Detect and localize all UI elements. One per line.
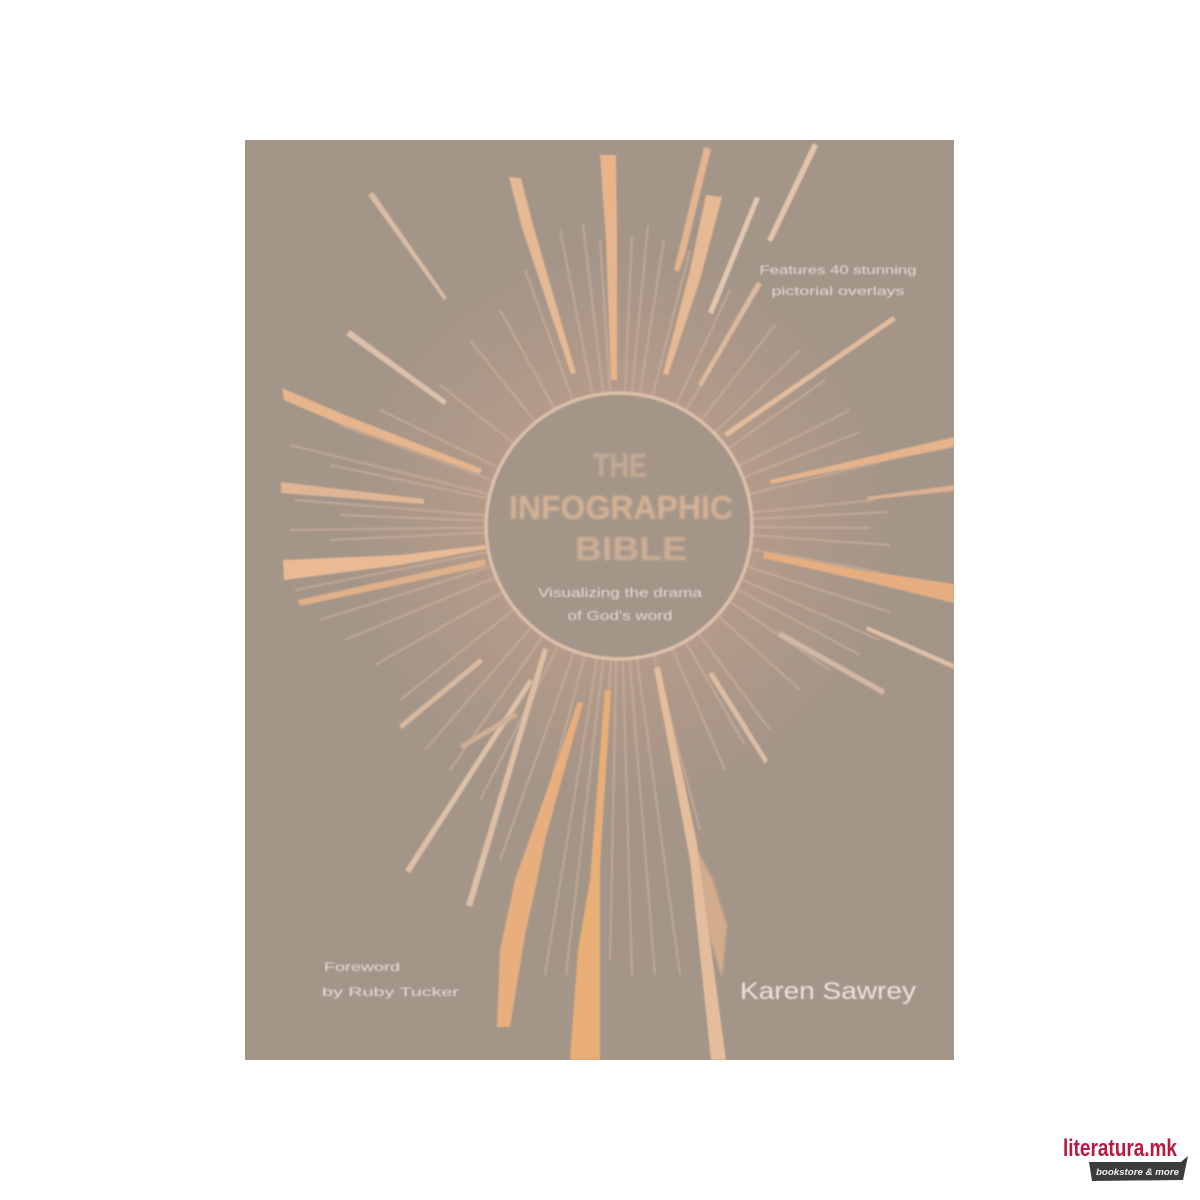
warm halo behind rays bbox=[420, 327, 818, 726]
author name: Karen Sawrey bbox=[740, 978, 916, 1005]
ray: top right long lower bbox=[698, 282, 762, 386]
ray: left middle bbox=[281, 482, 424, 504]
ray: right lower light bbox=[778, 631, 885, 695]
foreword credit: by Ruby Tucker bbox=[322, 985, 459, 999]
logo tagline: bookstore & more bbox=[1096, 1167, 1180, 1178]
ray: upper left short bbox=[368, 192, 447, 300]
title: BIBLE bbox=[575, 530, 687, 567]
ray: right lowest bbox=[866, 626, 954, 669]
ray: bottom center thick bbox=[570, 690, 611, 1060]
ray: top right 1 bbox=[674, 147, 711, 272]
subtitle: Visualizing the drama bbox=[538, 585, 703, 600]
subtitle: of God's word bbox=[568, 608, 672, 623]
ray: top center thick bbox=[600, 155, 617, 380]
ray: bottom left thick bbox=[497, 702, 583, 1027]
badge: circle around title bbox=[486, 393, 752, 659]
ray: left thick lower bbox=[283, 545, 486, 580]
logo banner bbox=[1089, 1156, 1188, 1181]
ray: right upper bbox=[724, 316, 896, 437]
tagline top right bbox=[760, 263, 916, 298]
foreword credit bbox=[322, 960, 459, 999]
ray: right middle lower bbox=[763, 552, 954, 603]
ray: left thick upper bbox=[282, 388, 482, 474]
ray: lower left second long bbox=[466, 648, 548, 907]
panel: book cover background bbox=[245, 140, 954, 1060]
ray: right middle upper bbox=[770, 437, 954, 484]
ray: lower left far bbox=[399, 658, 483, 729]
ray: bottom right wedge bbox=[697, 850, 727, 978]
ray: top right 3 bbox=[708, 197, 760, 314]
foreword credit: Foreword bbox=[324, 960, 400, 974]
sunburst rays bbox=[281, 143, 954, 1060]
ray: top right long upper bbox=[767, 143, 818, 242]
title: THE bbox=[593, 447, 647, 485]
ray: lower left thin bbox=[460, 712, 518, 749]
logo: literatura.mk bbox=[1063, 1135, 1188, 1181]
tagline top right: pictorial overlays bbox=[772, 284, 904, 298]
ray: top left thick bbox=[509, 177, 576, 374]
ray: bottom right long bbox=[654, 667, 726, 1060]
ray: left lowest bbox=[298, 559, 486, 606]
title bbox=[509, 447, 733, 567]
subtitle bbox=[538, 585, 703, 623]
ray: lower left long bbox=[405, 679, 533, 873]
faint thin rays bbox=[290, 225, 890, 975]
ray: lower right short bbox=[708, 672, 768, 764]
ray: top right 2 bbox=[663, 195, 722, 375]
title: INFOGRAPHIC bbox=[509, 489, 733, 526]
ray: left upper short bbox=[346, 330, 447, 405]
book cover illustration bbox=[245, 140, 1188, 1181]
ray: right small bbox=[867, 485, 954, 500]
tagline top right: Features 40 stunning bbox=[760, 263, 916, 277]
